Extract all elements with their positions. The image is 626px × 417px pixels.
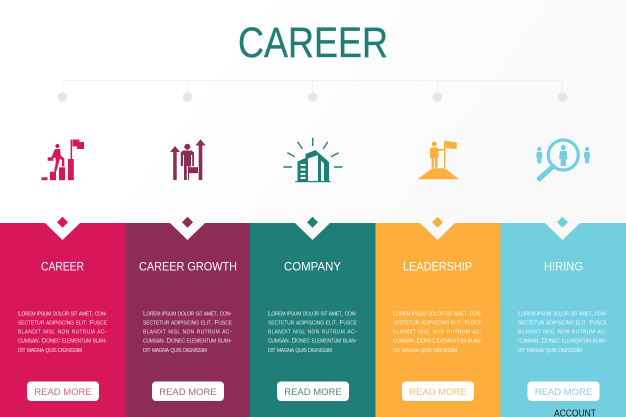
timeline connectors bbox=[58, 80, 567, 102]
panel: career bbox=[0, 217, 126, 417]
panel: hiring bbox=[500, 217, 626, 417]
body text: blandit nisl non rutrum ac- bbox=[393, 329, 482, 336]
button bbox=[152, 382, 224, 401]
body text: cumsan. Donec elementum blan- bbox=[393, 338, 482, 345]
heading: COMPANY bbox=[284, 260, 341, 274]
panel: leadership bbox=[376, 217, 500, 417]
button: READ MORE bbox=[535, 387, 592, 398]
body text: blandit nisl non rutrum ac- bbox=[18, 329, 107, 336]
button bbox=[277, 382, 349, 401]
body text: sectetur adipiscing elit. Fusce bbox=[393, 320, 483, 326]
body text: cumsan. Donec elementum blan- bbox=[143, 338, 232, 345]
panel: career growth bbox=[126, 217, 250, 417]
body text: sectetur adipiscing elit. Fusce bbox=[518, 320, 608, 326]
panel: company bbox=[250, 217, 376, 417]
button: READ MORE bbox=[409, 387, 467, 398]
body text: dit magna quis dignissim bbox=[268, 347, 332, 354]
heading: HIRING bbox=[544, 260, 583, 274]
button: READ MORE bbox=[284, 387, 342, 398]
body text bbox=[393, 310, 483, 354]
body text: cumsan. Donec elementum blan- bbox=[18, 338, 107, 345]
button bbox=[402, 382, 474, 401]
marker diamond bbox=[307, 217, 318, 228]
body text: blandit nisl non rutrum ac- bbox=[268, 329, 357, 336]
marker diamond bbox=[432, 217, 443, 228]
body text: dit magna quis dignissim bbox=[518, 347, 582, 354]
body text: sectetur adipiscing elit. Fusce bbox=[268, 320, 358, 326]
body text: dit magna quis dignissim bbox=[18, 347, 82, 354]
body text bbox=[268, 310, 358, 354]
icon: leader with flag on summit bbox=[417, 141, 459, 179]
button: READ MORE bbox=[159, 387, 217, 398]
body text bbox=[18, 310, 108, 354]
body text: cumsan. Donec elementum blan- bbox=[268, 338, 357, 345]
icon: climbing steps to flag bbox=[42, 140, 84, 180]
body text: sectetur adipiscing elit. Fusce bbox=[143, 320, 233, 326]
body text bbox=[518, 310, 608, 354]
body text: dit magna quis dignissim bbox=[393, 347, 457, 354]
marker diamond bbox=[182, 217, 193, 228]
marker diamond bbox=[557, 217, 568, 228]
body text: blandit nisl non rutrum ac- bbox=[518, 329, 607, 336]
button: READ MORE bbox=[34, 387, 92, 398]
body text: Lorem ipsum dolor sit amet, con- bbox=[143, 310, 232, 318]
body text bbox=[143, 310, 233, 354]
title: CAREER bbox=[238, 19, 388, 67]
button bbox=[528, 382, 600, 401]
body text: cumsan. Donec elementum blan- bbox=[518, 338, 607, 345]
heading: CAREER bbox=[41, 260, 84, 274]
body text: Lorem ipsum dolor sit amet, con- bbox=[268, 310, 357, 318]
icon: company building with rays bbox=[283, 138, 342, 182]
marker diamond bbox=[57, 217, 68, 228]
body text: Lorem ipsum dolor sit amet, con- bbox=[393, 310, 482, 318]
button bbox=[27, 382, 99, 401]
heading: CAREER GROWTH bbox=[139, 260, 237, 274]
body text: blandit nisl non rutrum ac- bbox=[143, 329, 232, 336]
body text: sectetur adipiscing elit. Fusce bbox=[18, 320, 108, 326]
heading: LEADERSHIP bbox=[403, 260, 472, 274]
icon: businessman between rising arrows bbox=[170, 139, 206, 180]
body text: Lorem ipsum dolor sit amet, con- bbox=[518, 310, 607, 318]
body text: Lorem ipsum dolor sit amet, con- bbox=[18, 310, 107, 318]
icon: magnifier searching people bbox=[536, 140, 590, 179]
body text: dit magna quis dignissim bbox=[143, 347, 207, 354]
